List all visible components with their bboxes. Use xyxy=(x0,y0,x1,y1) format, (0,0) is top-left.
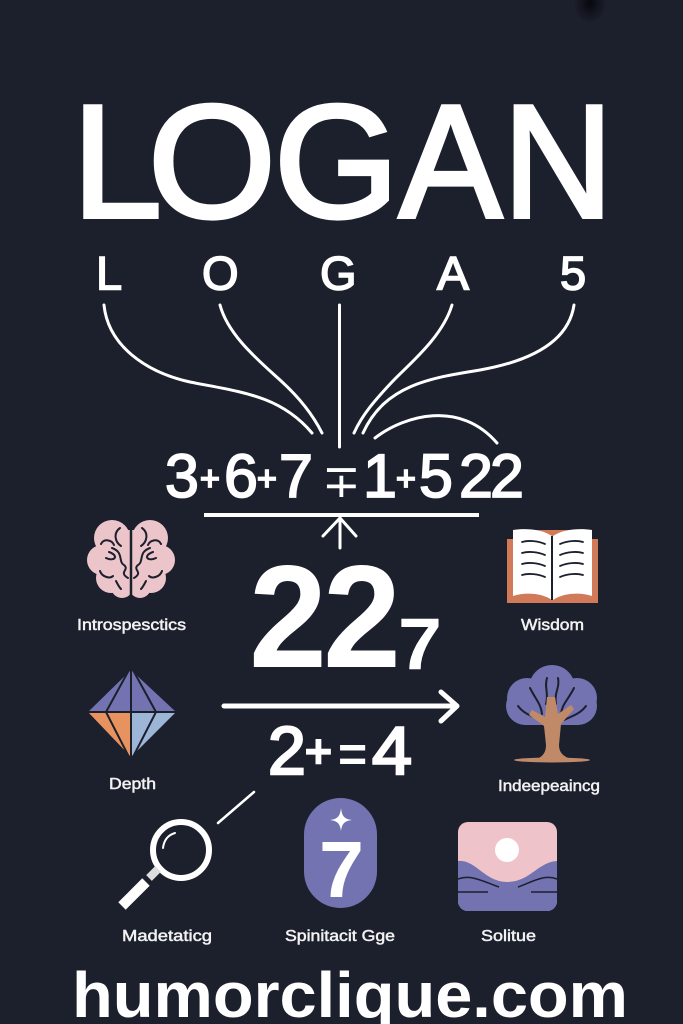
label: meditation: Madetaticg xyxy=(122,928,212,945)
equation: 6 xyxy=(224,442,258,510)
title: G xyxy=(274,72,399,252)
sub equation: + xyxy=(305,725,332,777)
icon: brain xyxy=(87,518,175,599)
connector curves xyxy=(104,305,574,447)
equation: + xyxy=(257,460,277,498)
icon: magnifying glass xyxy=(122,822,209,906)
title: L xyxy=(72,72,162,252)
title xyxy=(72,72,613,252)
big number 22 with subscript 7: 2 xyxy=(323,535,401,698)
equation: 1 xyxy=(363,442,397,510)
label: depth: Depth xyxy=(109,776,156,793)
icon: seven badge: 7 xyxy=(319,825,364,914)
letter row: A xyxy=(437,246,470,300)
equation: 5 xyxy=(419,442,453,510)
equation: 7 xyxy=(279,442,313,510)
big number 22 with subscript 7: 2 xyxy=(249,535,327,698)
letter row: G xyxy=(320,246,357,300)
letter row xyxy=(96,246,586,300)
title: A xyxy=(399,72,503,252)
label: introspection: Introspesctics xyxy=(77,617,186,634)
icon: gem xyxy=(88,670,176,757)
letter row: L xyxy=(96,246,122,300)
title: N xyxy=(503,72,613,252)
sub equation: 2 xyxy=(268,713,306,789)
diagonal stroke xyxy=(218,792,254,823)
sub equation: = xyxy=(338,726,367,782)
equation: ∓ xyxy=(322,454,361,508)
right arrow xyxy=(224,692,457,721)
equation: + xyxy=(396,460,416,498)
equation: + xyxy=(200,460,220,498)
sum line with up arrow xyxy=(204,515,479,548)
label: spiritual age: Spinitacit Gge xyxy=(285,928,395,945)
label: independence: Indeepeaincg xyxy=(498,778,600,795)
big number 22 with subscript 7 xyxy=(249,535,442,698)
sub equation xyxy=(268,713,412,789)
letter row: O xyxy=(202,246,239,300)
icon: seven badge xyxy=(304,798,377,914)
sub equation: 4 xyxy=(372,713,412,789)
letter row: 5 xyxy=(560,246,586,300)
big number 22 with subscript 7: 7 xyxy=(398,604,442,685)
label: wisdom: Wisdom xyxy=(521,617,584,634)
equation xyxy=(165,442,524,510)
icon: solitude landscape xyxy=(458,822,557,911)
equation: 2 xyxy=(459,442,493,510)
label: solitude: Solitue xyxy=(481,928,536,945)
title: O xyxy=(148,72,276,252)
equation: 2 xyxy=(490,442,524,510)
equation: 3 xyxy=(165,442,199,510)
icon: book xyxy=(507,529,598,603)
icon: tree xyxy=(506,665,597,762)
